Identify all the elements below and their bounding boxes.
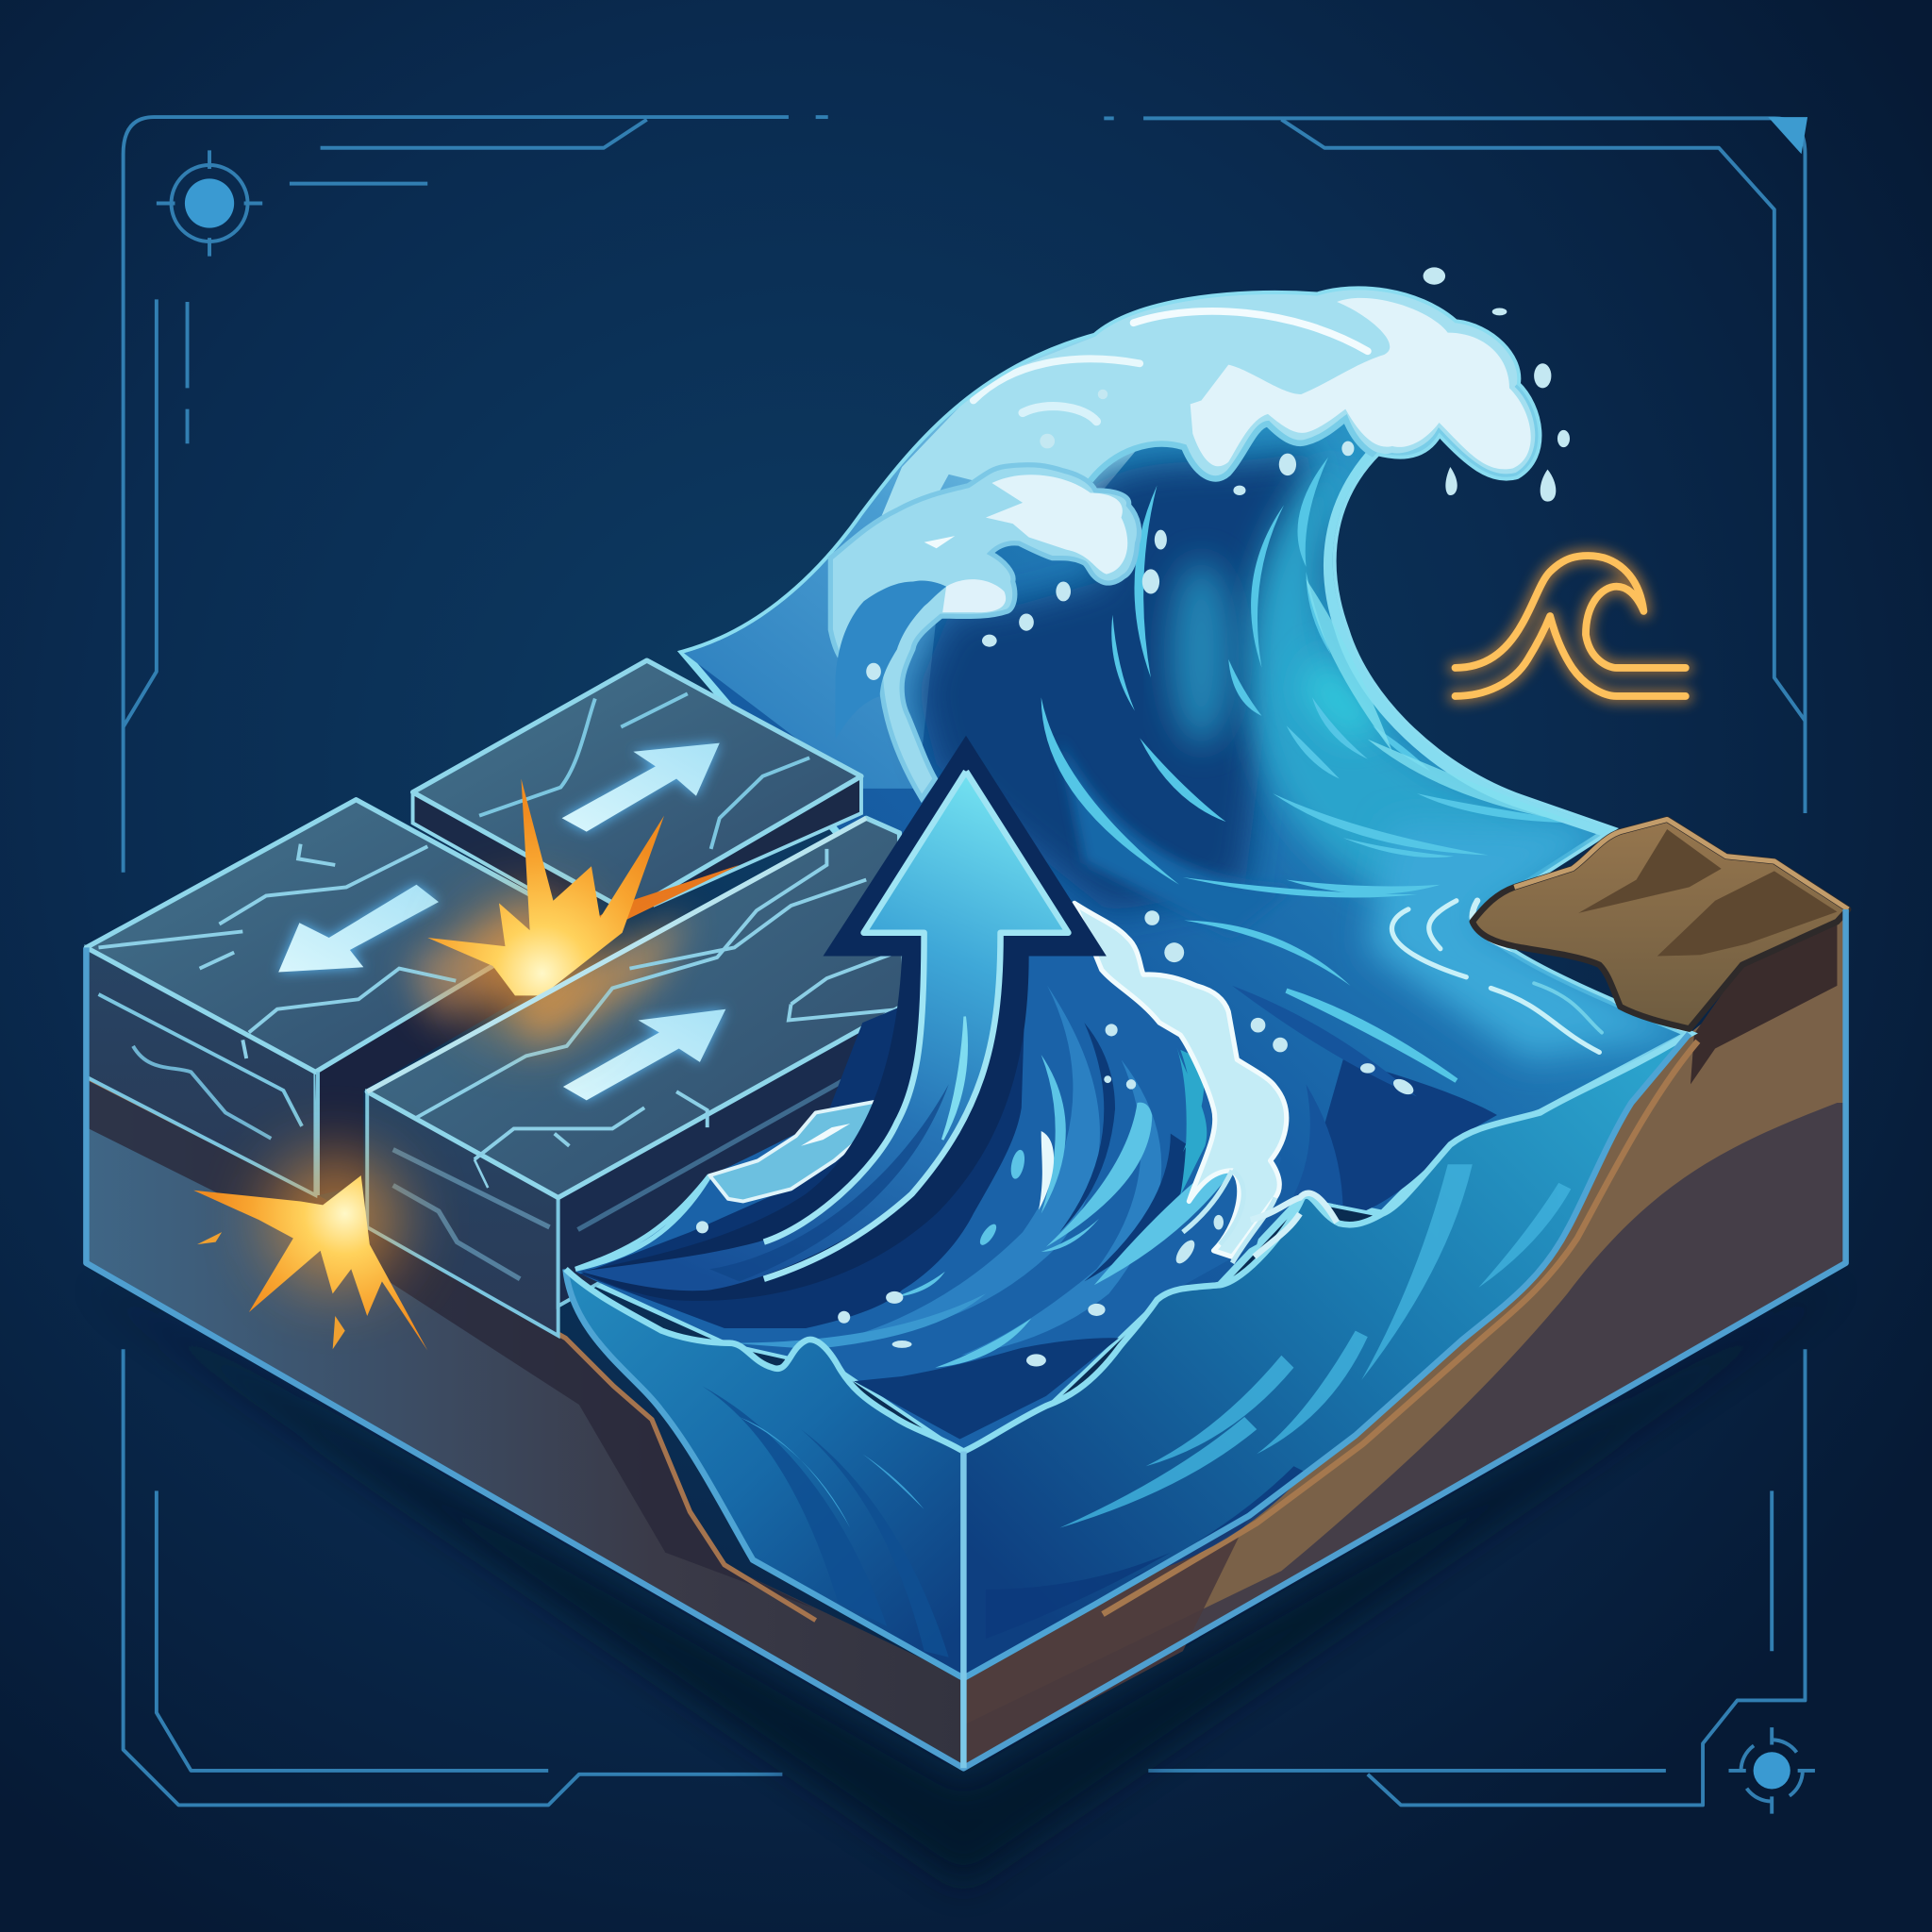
- dark curl interior: [918, 450, 1331, 912]
- navy v: [854, 1338, 1119, 1440]
- wave back: [684, 357, 1136, 789]
- mid surface bands: [1232, 986, 1417, 1214]
- tech frame: [124, 117, 1805, 1805]
- ground left face: [86, 1077, 963, 1768]
- plate: left: [86, 800, 573, 1195]
- icon: bottom right target: [1728, 1727, 1815, 1814]
- block outline: [86, 909, 1846, 1768]
- foam inner loop: [1183, 1171, 1275, 1263]
- dark swirl right: [1319, 1059, 1497, 1220]
- water droplets: [696, 267, 1570, 1366]
- plate: back: [413, 660, 861, 912]
- block shadow: [86, 1281, 1846, 1885]
- shore shallow: [1368, 825, 1690, 1059]
- small crest highlight: [924, 536, 955, 548]
- curl rim bright: [1329, 456, 1610, 833]
- crest white foam: [1191, 298, 1531, 469]
- curl inner bright streaks: [1306, 579, 1545, 817]
- front water face right: [963, 1034, 1690, 1678]
- teal under foam: [1176, 1047, 1207, 1195]
- plate: front: [367, 818, 906, 1336]
- front water swirl: [575, 903, 1281, 1452]
- bright tapers: [652, 1050, 1232, 1368]
- mountain: [1473, 820, 1848, 1029]
- icon: corner triangle: [1768, 117, 1807, 154]
- surf at right foam base: [1251, 1193, 1337, 1257]
- small crest foam: [986, 475, 1127, 575]
- arrow: left plate: [278, 885, 439, 973]
- arrow: front plate: [563, 1009, 725, 1100]
- rim: [1103, 1041, 1698, 1614]
- shore surf: [1391, 901, 1690, 1052]
- water body: [86, 267, 1848, 1768]
- water streaks: [1041, 458, 1590, 1080]
- small crest foam lower: [942, 579, 1006, 612]
- bottom strip: [963, 1516, 1249, 1768]
- warm glow: [518, 912, 690, 1047]
- navy lower band: [580, 954, 1026, 1328]
- brown ground edge: [86, 1077, 816, 1621]
- warm glow: [407, 899, 542, 1023]
- dark ground band: [86, 1077, 813, 1607]
- icon: orange wave: [1456, 556, 1686, 696]
- deep mid band: [1060, 749, 1277, 909]
- arrow: back plate: [562, 743, 720, 832]
- small crest: [830, 465, 1140, 798]
- dark band: [1690, 922, 1837, 1084]
- arrow: big up arrow: [580, 736, 1107, 1301]
- small crest under blue: [836, 580, 946, 740]
- foam crest big: [881, 291, 1536, 515]
- foam surf left: [575, 1100, 882, 1269]
- white comma: [1039, 1131, 1054, 1210]
- mid blue column: [1170, 560, 1233, 745]
- teal core: [1300, 653, 1392, 740]
- swirl drops: [977, 1149, 1166, 1247]
- lower slate: [963, 1103, 1846, 1768]
- crack streak: [434, 865, 740, 1038]
- cyan curl band: [1247, 468, 1602, 918]
- swirl bands: [729, 986, 1161, 1356]
- crest under rim: [1091, 385, 1539, 480]
- explosion: bottom: [193, 1152, 427, 1351]
- crest highlights: [974, 311, 1368, 422]
- ground right face: [963, 906, 1846, 1768]
- front water face left: [566, 1269, 963, 1678]
- icon: top left target: [157, 150, 262, 257]
- explosion: top: [367, 778, 866, 1091]
- lower wave foam: [1074, 903, 1287, 1257]
